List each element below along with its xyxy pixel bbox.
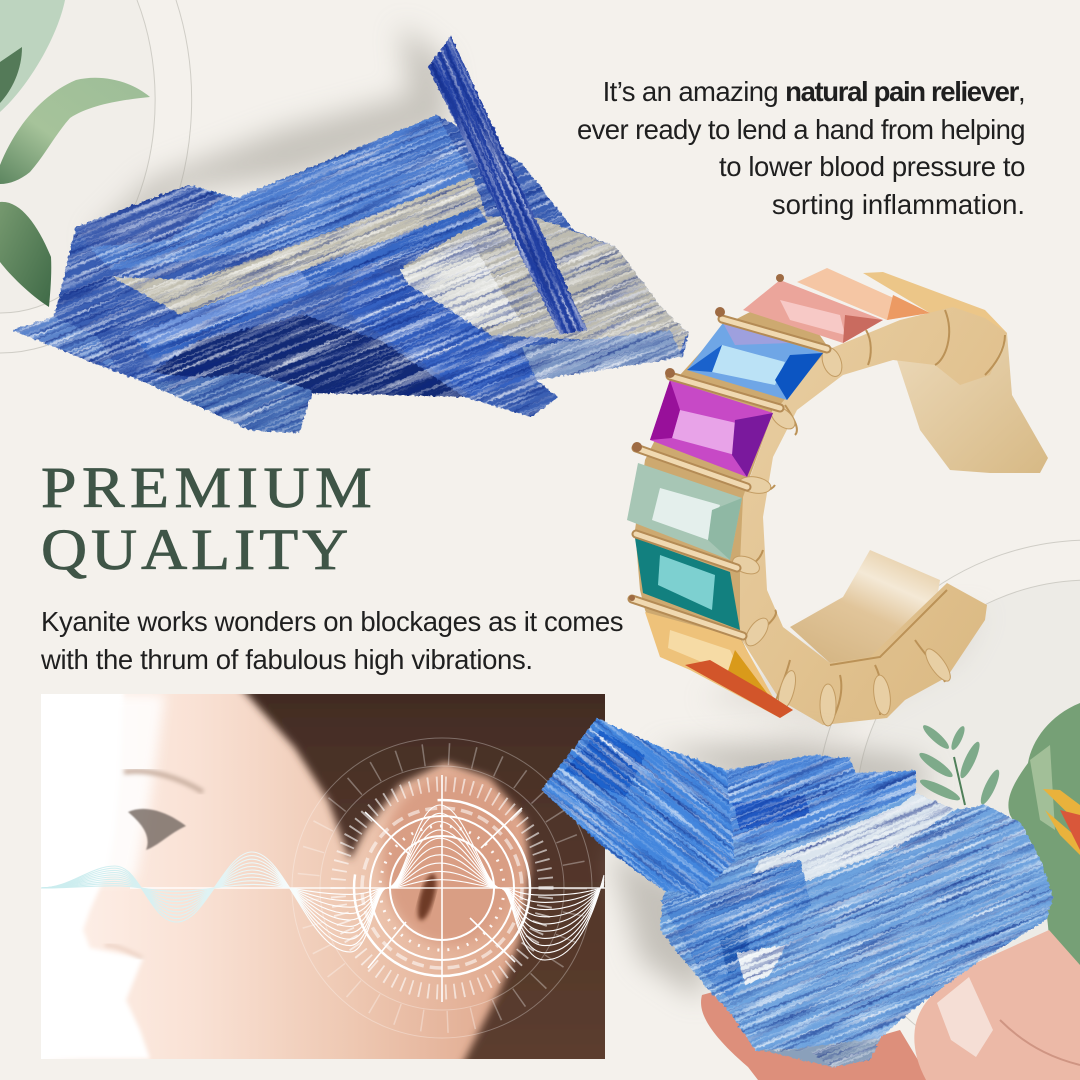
white quartz [737, 793, 955, 905]
inner lower surface [790, 550, 940, 663]
hair [238, 694, 605, 1059]
left end [13, 317, 116, 367]
crystal base [660, 755, 1053, 1067]
icon: leaves top left [0, 0, 150, 307]
text block: top right: to lower blood pressure to [719, 151, 1025, 182]
main slab [755, 805, 1053, 1050]
eyebrow [124, 771, 203, 792]
nail [937, 977, 993, 1057]
nose shadow [105, 945, 143, 958]
band ridges [735, 310, 1005, 725]
gem: teal [635, 538, 740, 630]
text block: body: Kyanite works wonders on blockages as it comes [41, 606, 623, 637]
icon: rainbow gem ring [627, 268, 1048, 726]
text block: top right: It’s an amazing natural pain reliever, [603, 76, 1025, 107]
tall bar [428, 36, 587, 335]
text block: body [41, 606, 623, 675]
white chip [737, 945, 786, 985]
white background and profile [54, 694, 150, 1059]
icon: lower kyanite crystal [541, 718, 1053, 1067]
palm and fingers [701, 990, 930, 1080]
bottom base [760, 1038, 880, 1067]
arm texture [541, 718, 735, 895]
gem backing [635, 285, 830, 700]
gem dividers [632, 319, 827, 636]
streak texture [660, 755, 1053, 1067]
upper mid [726, 755, 916, 845]
icon: hand holding lower crystal [701, 930, 1080, 1080]
thumb [914, 930, 1080, 1080]
top-left block [76, 185, 223, 247]
crystal base [13, 115, 688, 433]
heading: QUALITY [41, 517, 352, 582]
far gem [863, 272, 1007, 333]
gem: blue [687, 323, 823, 400]
bar texture [428, 36, 587, 335]
forehead highlight [104, 694, 167, 883]
shadow behind lower crystal [610, 740, 930, 1000]
upper beam [76, 115, 473, 270]
gem: peach [797, 268, 930, 320]
shadow behind top crystal [90, 25, 450, 250]
streak texture [13, 115, 688, 433]
gem: coral [743, 280, 883, 343]
shadow behind ring [700, 610, 985, 730]
lower diagonal beam [130, 207, 487, 360]
grey matrix [112, 177, 487, 320]
gem: pale green [627, 463, 742, 560]
radial rings [130, 738, 605, 1038]
face skin [41, 694, 535, 1059]
dark cave [152, 315, 464, 397]
heading: PREMIUM [41, 455, 377, 520]
bottom chunk [147, 373, 312, 433]
band prong bumps [730, 345, 955, 726]
text block: top right: sorting inflammation. [772, 188, 1025, 220]
gem: magenta [650, 380, 773, 477]
inner upper surface [897, 333, 1048, 473]
text block: body: with the thrum of fabulous high vibrations. [41, 644, 533, 674]
mid left [660, 860, 811, 1000]
gem: amber [645, 612, 793, 718]
icon: leaves bottom right [917, 703, 1080, 967]
text block: top right: ever ready to lend a hand from helping [577, 114, 1025, 144]
panel: ear photo with sound wave [41, 694, 605, 1059]
sound wave lines [41, 805, 604, 960]
heading [41, 455, 377, 582]
ear canal [414, 872, 440, 922]
gold band [740, 307, 1007, 725]
icon: top kyanite crystal [13, 36, 688, 433]
prongs [629, 274, 784, 601]
eye [128, 809, 186, 850]
ear [382, 775, 518, 945]
text block: top right [577, 76, 1025, 220]
right lower bar [522, 330, 683, 380]
arm [541, 718, 735, 895]
front diagonal beam [339, 260, 545, 397]
